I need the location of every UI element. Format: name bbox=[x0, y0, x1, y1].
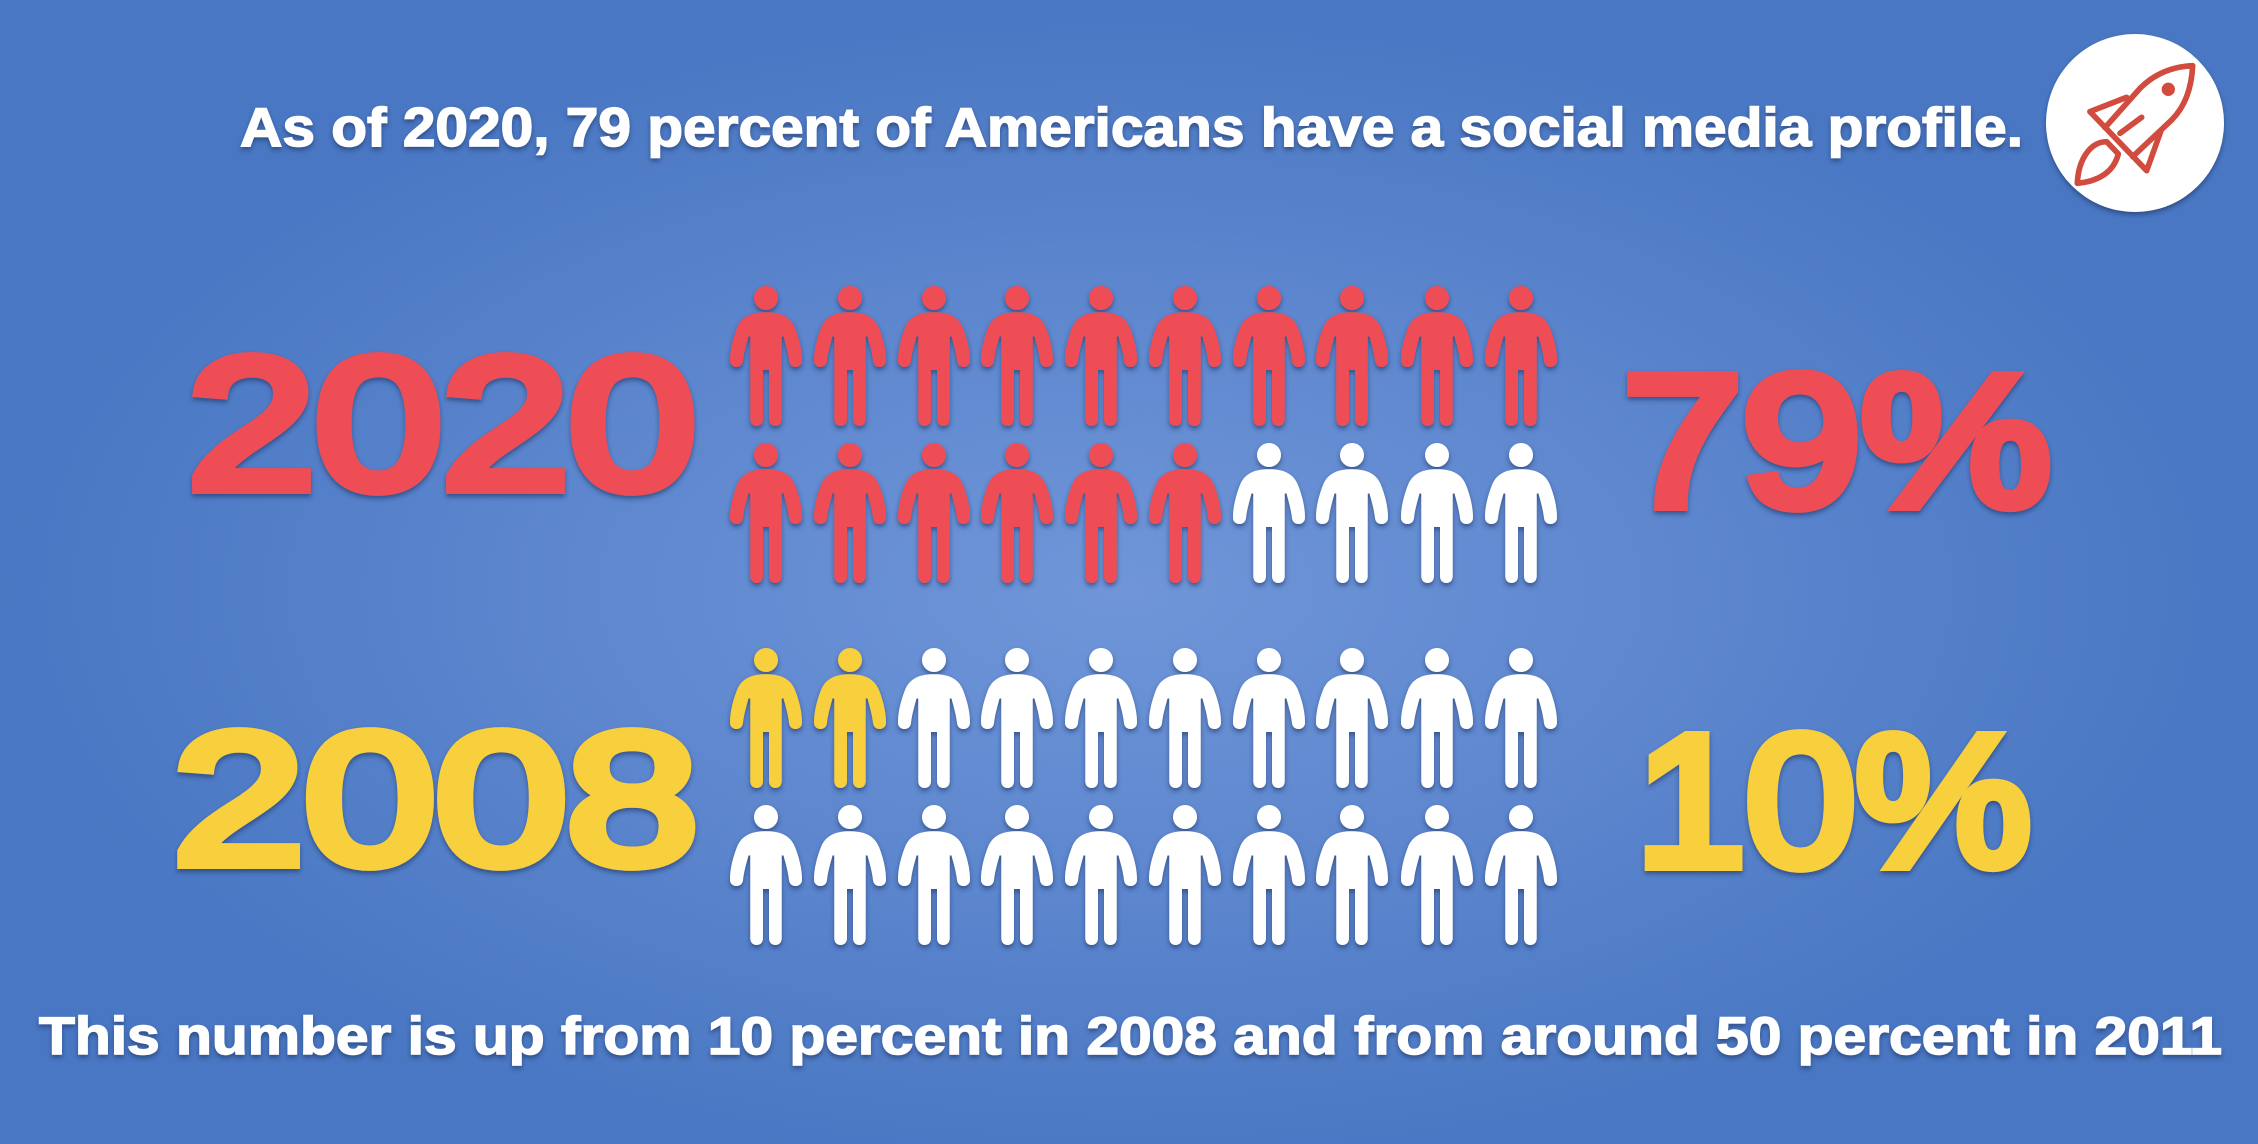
year 2020: 2020 bbox=[188, 321, 696, 528]
pictogram 2008: 2 yellow of 20 bbox=[730, 648, 1557, 945]
pictogram 2020: 16 red of 20 bbox=[730, 286, 1557, 583]
icon: rocket badge bbox=[2046, 34, 2224, 212]
percent 79%: 79% bbox=[1623, 338, 2051, 545]
year 2008: 2008 bbox=[173, 696, 698, 903]
title: As of 2020, 79 percent of Americans have a social media profile. bbox=[240, 96, 2023, 158]
percent 10%: 10% bbox=[1636, 698, 2031, 905]
footer text: This number is up from 10 percent in 2008 and from around 50 percent in 2011 bbox=[39, 1007, 2222, 1066]
